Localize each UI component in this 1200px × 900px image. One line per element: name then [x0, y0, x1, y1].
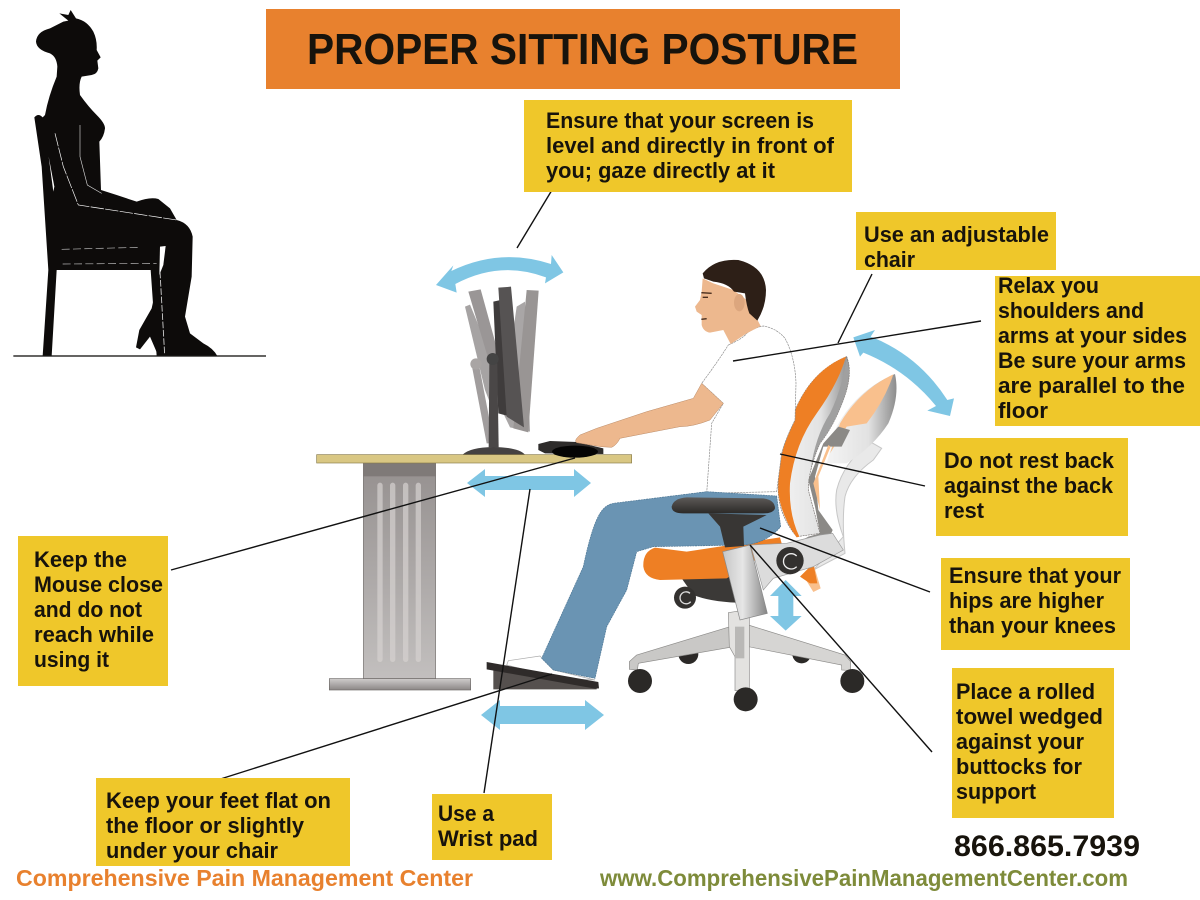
backrest: [778, 357, 850, 543]
chair seat cushion: [643, 537, 782, 580]
callout: shoulders and arms: [995, 273, 1200, 426]
callout: screen position: level and directly in front of: [546, 133, 835, 158]
title banner: [266, 9, 900, 89]
arrow: keyboard distance: [467, 469, 591, 497]
callout: mouse position: Mouse close: [34, 572, 163, 597]
arrow: backrest recline: [853, 330, 954, 416]
chair gas column: [723, 545, 767, 620]
footrest: [487, 662, 599, 689]
callout: shoulders and arms: floor: [998, 398, 1048, 423]
callout: rolled towel: against your: [956, 729, 1084, 754]
callout: mouse position: reach while: [34, 622, 154, 647]
callout: adjustable chair: chair: [864, 247, 915, 272]
desk top: [317, 455, 632, 463]
callout: rolled towel: Place a rolled: [956, 679, 1095, 704]
man: eye, eyebrow and mouth: [701, 293, 712, 319]
callout: mouse position: Keep the: [34, 547, 127, 572]
callout: feet position: [96, 778, 350, 866]
under-seat mechanism: [674, 575, 737, 609]
man: arm and hand: [576, 383, 723, 447]
callout: rolled towel: towel wedged: [956, 704, 1103, 729]
armrest and post: [672, 497, 775, 547]
arrow: monitor tilt: [436, 255, 563, 293]
man: shirt: [702, 326, 796, 493]
callout: wrist pad: [432, 794, 552, 860]
callout: hips above knees: [941, 558, 1130, 650]
callout: feet position: the floor or slightly: [106, 813, 305, 838]
man: ear: [734, 294, 745, 311]
callout: screen position: Ensure that your screen is: [546, 108, 814, 133]
ghost backrest, reclined position: [813, 374, 896, 570]
desk column and foot: [329, 463, 471, 690]
leader lines: [171, 190, 981, 793]
callout: shoulders and arms: are parallel to the: [998, 373, 1185, 398]
callout: mouse position: [18, 536, 168, 686]
callout: screen position: [524, 100, 852, 192]
title banner: PROPER SITTING POSTURE: [307, 25, 858, 74]
callout: shoulders and arms: Be sure your arms: [998, 348, 1186, 373]
monitor shown in several tilt positions: [463, 287, 539, 455]
callout: back rest: against the back: [944, 473, 1114, 498]
callout: feet position: under your chair: [106, 838, 278, 863]
callout: wrist pad: Use a: [438, 801, 495, 826]
callout: back rest: [936, 438, 1128, 536]
callout: rolled towel: buttocks for: [956, 754, 1082, 779]
seat tilt mechanism and tail: [751, 533, 843, 592]
callout: screen position: you; gaze directly at it: [546, 158, 776, 183]
callout: back rest: rest: [944, 498, 985, 523]
wrist pad / mouse pad: [552, 446, 598, 458]
footer: website: www.ComprehensivePainManagementCenter.com: [599, 865, 1128, 891]
callout: shoulders and arms: arms at your sides: [998, 323, 1187, 348]
keyboard: [538, 441, 603, 454]
callout: feet position: Keep your feet flat on: [106, 788, 331, 813]
man: shoe: [507, 656, 595, 680]
callout: mouse position: and do not: [34, 597, 143, 622]
callout: adjustable chair: [856, 212, 1056, 272]
man: jeans: [542, 492, 781, 678]
arrow: footrest distance: [481, 700, 604, 730]
callout: hips above knees: hips are higher: [949, 588, 1104, 613]
chair base and casters: [628, 611, 864, 711]
callout: back rest: Do not rest back: [944, 448, 1115, 473]
illustration: woman seated in silhouette: [13, 10, 266, 357]
illustration: desk with monitor and keyboard: [317, 287, 632, 690]
callout: hips above knees: Ensure that your: [949, 563, 1121, 588]
callout: rolled towel: support: [956, 779, 1037, 804]
illustration: seated man in ergonomic chair: [487, 260, 896, 711]
callout: shoulders and arms: shoulders and: [998, 298, 1144, 323]
phone number: 866.865.7939: [954, 830, 1140, 863]
arrow: seat height: [770, 580, 802, 631]
footer: organisation name: Comprehensive Pain Management Center: [16, 865, 473, 891]
callout: hips above knees: than your knees: [949, 613, 1116, 638]
callout: rolled towel: [952, 668, 1114, 818]
callout: shoulders and arms: Relax you: [998, 273, 1099, 298]
man: head and neck: [695, 278, 761, 344]
callout: wrist pad: Wrist pad: [438, 826, 538, 851]
man: hair: [703, 260, 766, 321]
callout: adjustable chair: Use an adjustable: [864, 222, 1049, 247]
callout: mouse position: using it: [34, 647, 110, 672]
